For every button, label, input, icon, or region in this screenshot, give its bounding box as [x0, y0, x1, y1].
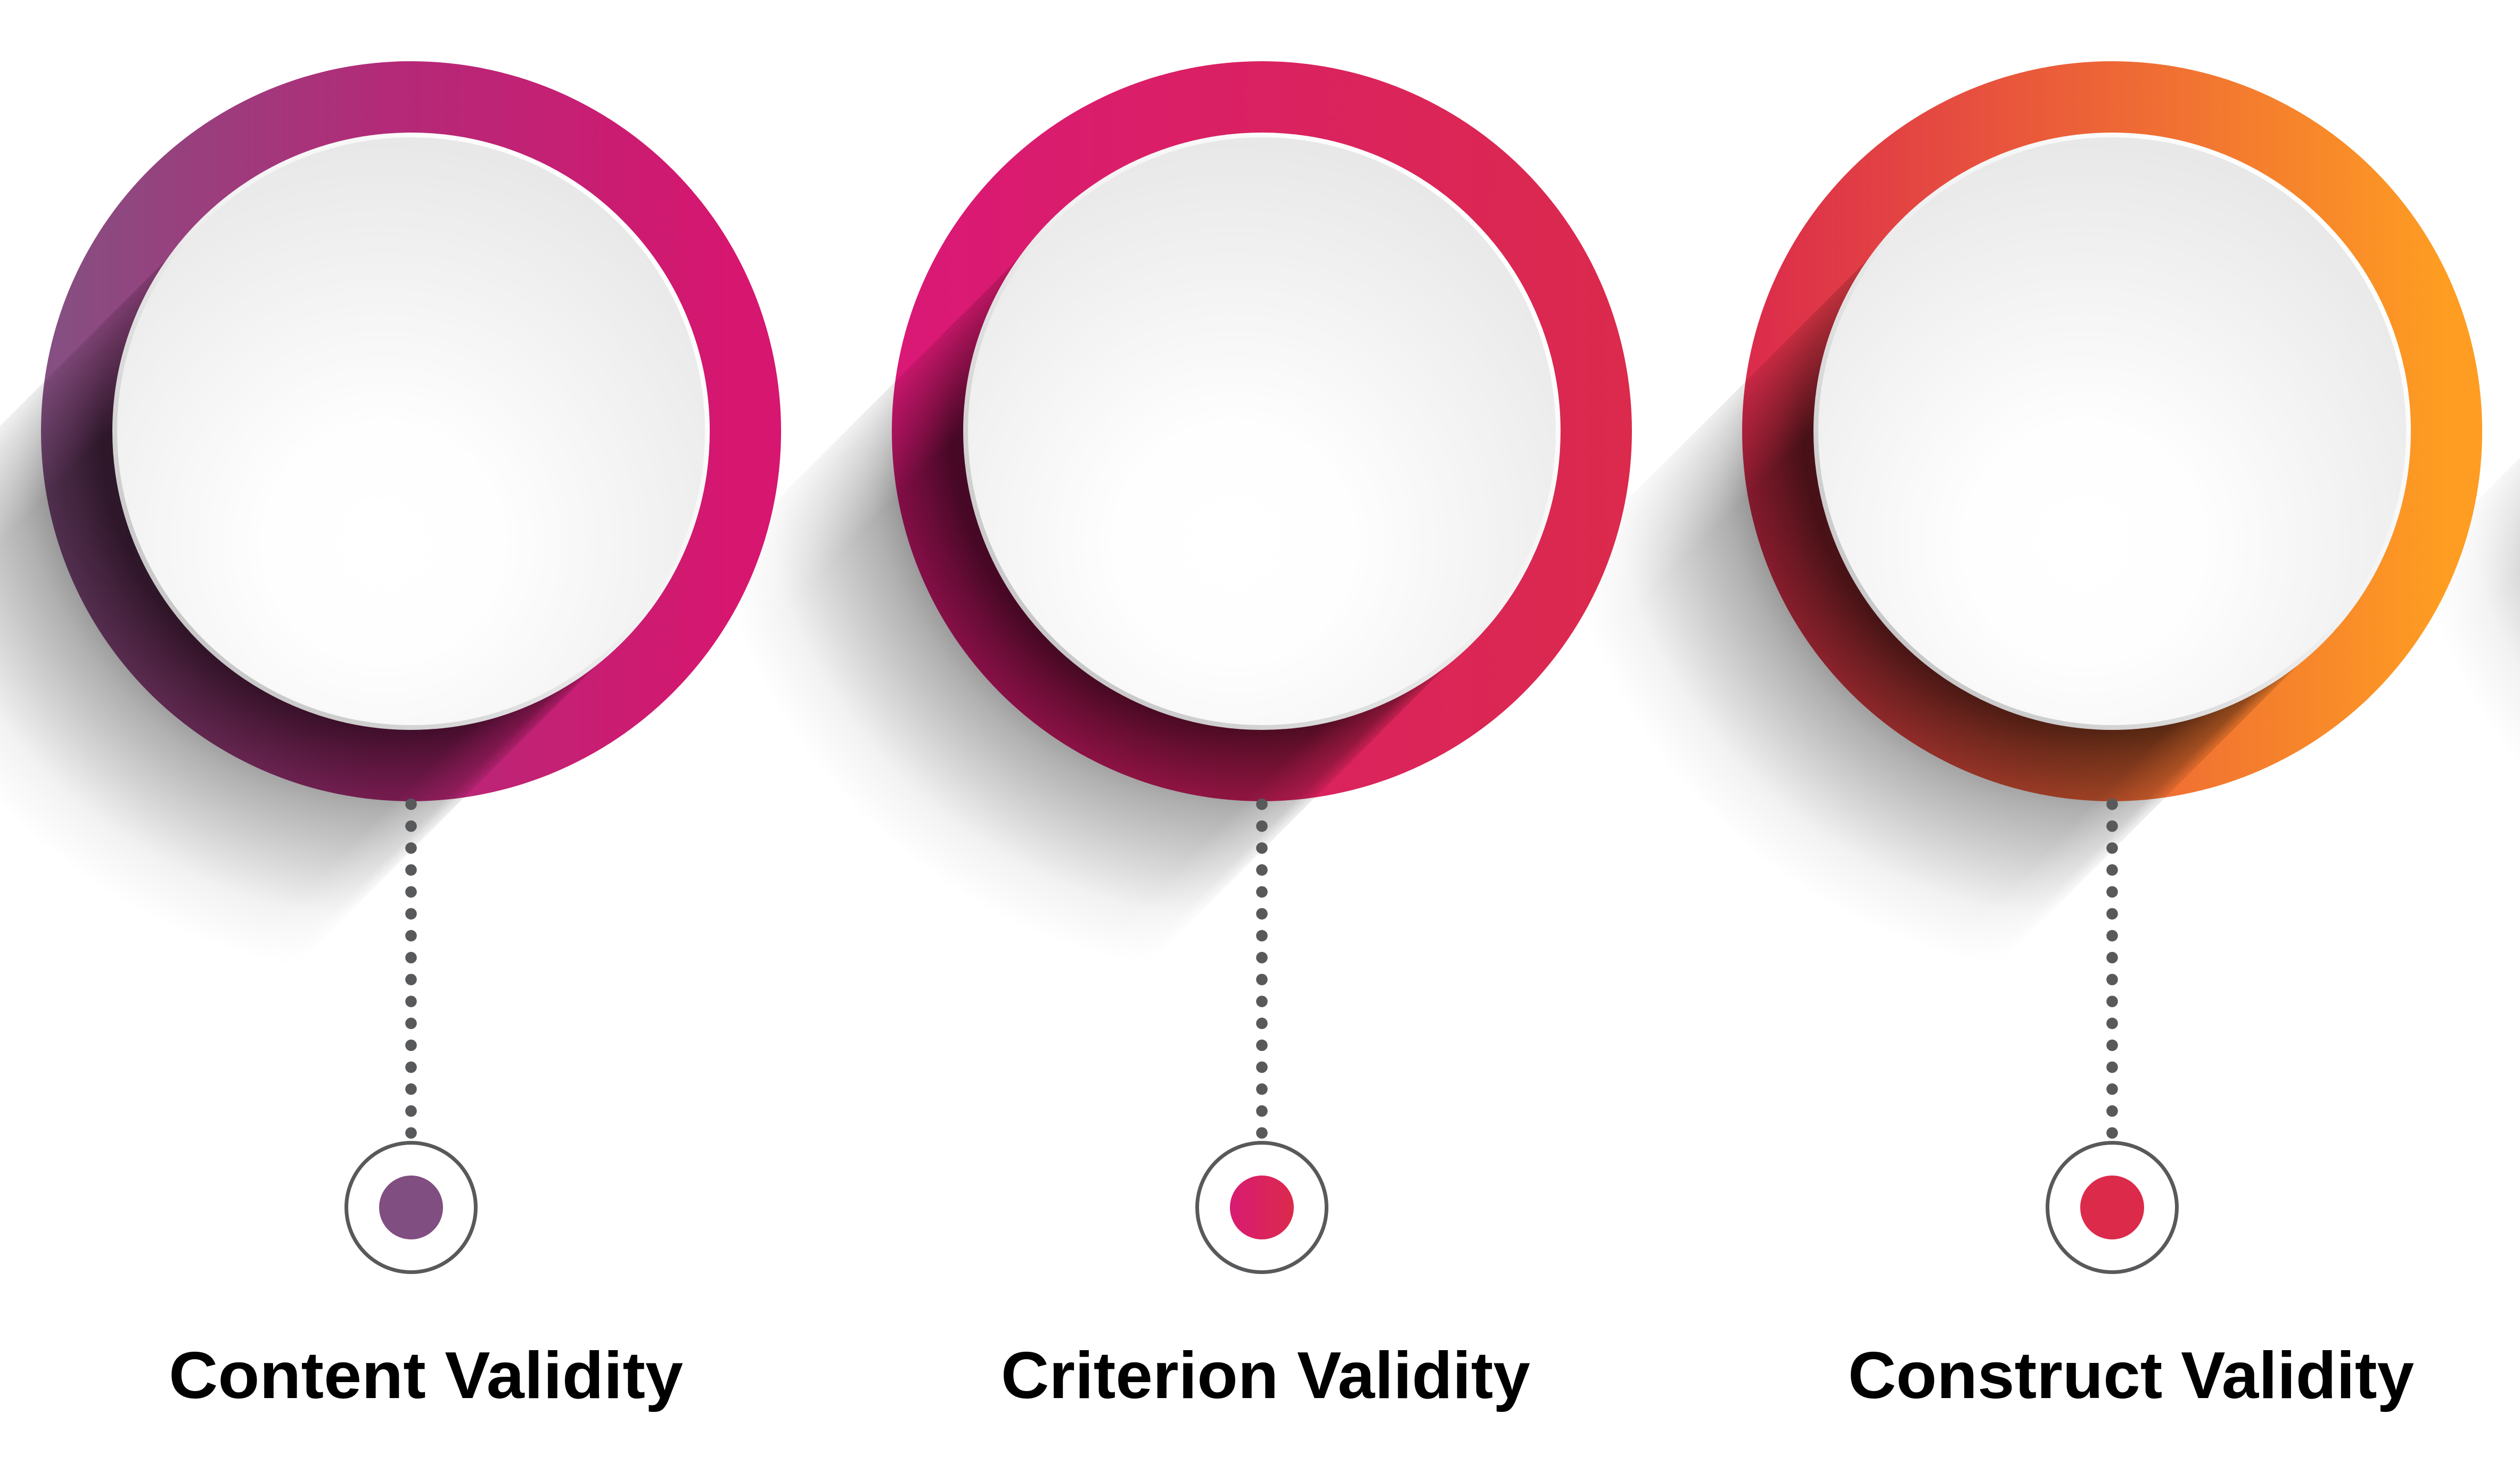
marker outer ring: [2048, 1143, 2177, 1272]
outer ring: red to orange: [1742, 61, 2482, 801]
inner white disc: [966, 135, 1558, 727]
outer ring: magenta to red: [892, 61, 1632, 801]
marker outer ring: [346, 1143, 476, 1272]
dotted connector: [2106, 804, 2118, 1133]
marker dot: [1230, 1176, 1294, 1239]
panel: construct validity: [1621, 61, 2482, 1412]
inner white disc: [115, 135, 707, 727]
label: Content Validity: [169, 1339, 683, 1412]
shadow of off-canvas circle at right edge: [2472, 458, 2520, 706]
label: Construct Validity: [1848, 1339, 2414, 1412]
dotted connector: [405, 804, 417, 1133]
outer ring: purple to magenta: [41, 61, 781, 801]
marker outer ring: [1197, 1143, 1327, 1272]
inner white disc: [1816, 135, 2409, 727]
long shadow: [1621, 259, 2297, 925]
long shadow: [0, 259, 596, 925]
dotted connector: [1256, 804, 1268, 1133]
marker dot: [379, 1176, 443, 1239]
panel: content validity: [0, 61, 781, 1429]
marker dot: [2080, 1176, 2144, 1239]
long shadow: [770, 259, 1447, 925]
panel: criterion validity: [770, 61, 1632, 1412]
label: Criterion Validity: [1001, 1339, 1530, 1412]
